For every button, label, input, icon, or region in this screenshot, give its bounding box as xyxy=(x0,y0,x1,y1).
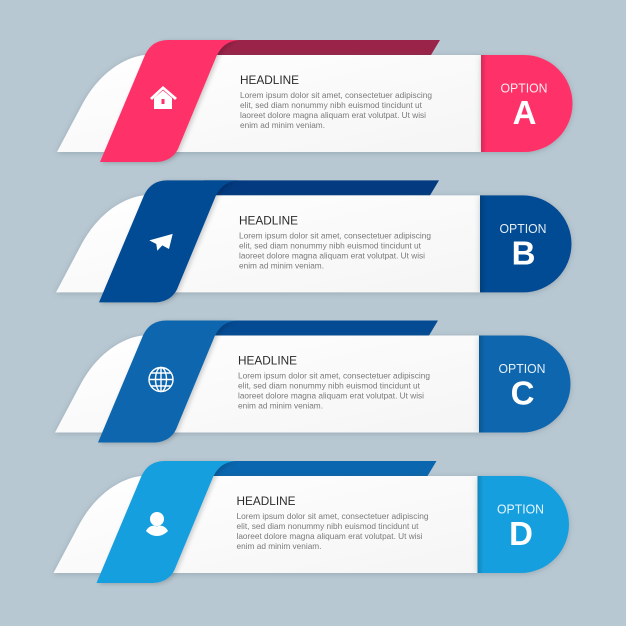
panel: option A xyxy=(57,40,572,162)
panel: option D xyxy=(54,461,569,583)
heading: HEADLINE xyxy=(238,354,297,368)
white card xyxy=(54,476,478,573)
text block xyxy=(239,230,431,270)
icon: globe xyxy=(149,368,173,392)
text block: elit, sed diam nonummy nibh euismod tincidunt ut xyxy=(236,521,419,531)
icon: paper plane xyxy=(149,234,173,251)
ribbon xyxy=(96,461,236,583)
text block xyxy=(236,511,429,551)
option label: OPTION xyxy=(500,222,546,236)
heading: HEADLINE xyxy=(236,494,296,508)
option letter: A xyxy=(513,94,536,131)
ribbon xyxy=(98,320,237,442)
heading: HEADLINE xyxy=(240,73,299,87)
text block: elit, sed diam nonummy nibh euismod tincidunt ut xyxy=(240,100,423,110)
text block: enim ad minim veniam. xyxy=(236,541,322,551)
icon: person xyxy=(146,512,168,536)
text block: enim ad minim veniam. xyxy=(238,400,323,410)
icon: house xyxy=(150,86,177,109)
text block: laoreet dolore magna aliquam erat volutpat. Ut wisi xyxy=(236,531,423,541)
dark top band xyxy=(202,461,436,476)
dark top band xyxy=(205,40,440,55)
text block: laoreet dolore magna aliquam erat volutpat. Ut wisi xyxy=(239,250,425,260)
ribbon xyxy=(100,40,239,162)
text block: Lorem ipsum dolor sit amet, consectetuer adipiscing xyxy=(236,511,429,521)
panel: option C xyxy=(55,320,570,442)
white card xyxy=(55,336,479,432)
panel: option B xyxy=(56,180,571,302)
option tab xyxy=(480,195,571,292)
option tab xyxy=(478,476,569,573)
text block: laoreet dolore magna aliquam erat volutpat. Ut wisi xyxy=(238,390,424,400)
text block xyxy=(238,370,430,410)
option letter: C xyxy=(511,374,534,412)
text block xyxy=(240,90,432,130)
text block: laoreet dolore magna aliquam erat volutpat. Ut wisi xyxy=(240,110,426,120)
white card xyxy=(56,195,480,292)
text block: elit, sed diam nonummy nibh euismod tincidunt ut xyxy=(239,240,422,250)
text block: enim ad minim veniam. xyxy=(239,260,324,270)
ribbon xyxy=(99,180,238,302)
dark top band xyxy=(203,320,438,336)
text block: Lorem ipsum dolor sit amet, consectetuer adipiscing xyxy=(240,90,432,100)
option label: OPTION xyxy=(498,362,546,376)
option label: OPTION xyxy=(500,82,548,96)
option letter: B xyxy=(512,234,535,271)
option letter: D xyxy=(509,515,533,552)
white card xyxy=(57,55,481,152)
text block: Lorem ipsum dolor sit amet, consectetuer adipiscing xyxy=(239,230,431,240)
heading: HEADLINE xyxy=(239,213,298,227)
dark top band xyxy=(204,180,439,195)
option tab xyxy=(479,336,570,432)
text block: enim ad minim veniam. xyxy=(240,120,325,130)
text block: Lorem ipsum dolor sit amet, consectetuer adipiscing xyxy=(238,370,430,380)
option label: OPTION xyxy=(497,502,544,516)
text block: elit, sed diam nonummy nibh euismod tincidunt ut xyxy=(238,380,421,390)
option tab xyxy=(481,55,572,152)
